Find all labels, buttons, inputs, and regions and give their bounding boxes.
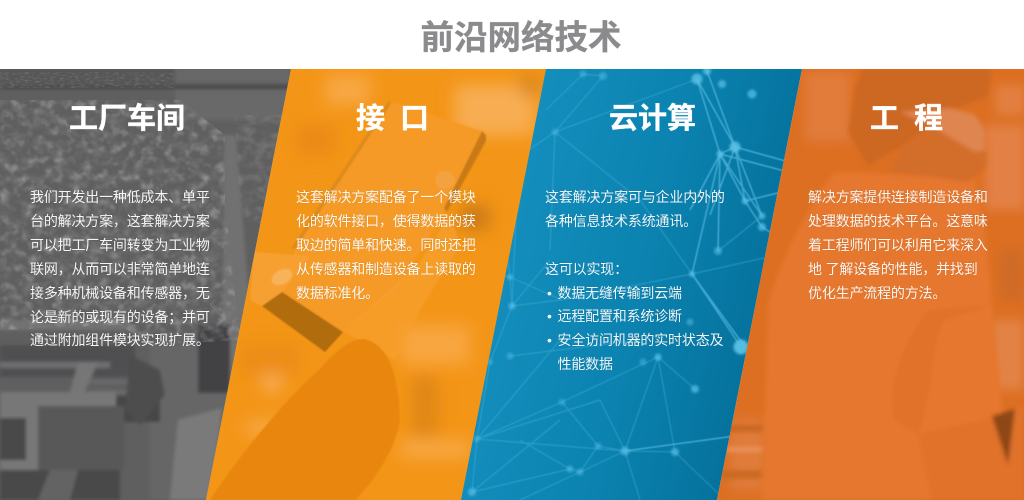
sleeve <box>210 339 400 500</box>
title: 前沿网络技术 <box>420 20 622 57</box>
bullet list: • <box>547 332 552 348</box>
network lines <box>472 74 764 500</box>
body text: 这套解决方案配备了一个模块 <box>296 189 476 205</box>
bullet list: • <box>547 308 552 324</box>
body text: 处理数据的技术平台。这意味 <box>808 213 988 229</box>
bullet text: 远程配置和系统诊断 <box>558 308 682 324</box>
body text: 我们开发出一种低成本、单平 <box>30 189 210 205</box>
body text: 数据标准化。 <box>296 285 379 301</box>
body text: 通过附加组件模块实现扩展。 <box>30 332 210 348</box>
body text: 联网，从而可以非常简单地连 <box>30 261 210 277</box>
heading: 云计算 <box>609 103 696 135</box>
shirt <box>762 172 1003 500</box>
bullet text: 数据无缝传输到云端 <box>558 284 682 300</box>
tablet photo background <box>206 69 546 500</box>
heading: 接 口 <box>356 103 429 135</box>
bullet text: 安全访问机器的实时状态及 <box>558 332 723 348</box>
panel: factory floor <box>0 69 291 500</box>
bullet text <box>558 284 723 372</box>
body text <box>296 189 476 301</box>
goggles <box>900 108 985 152</box>
bullet list <box>547 284 552 348</box>
panel: engineering <box>717 69 1024 500</box>
body text: 解决方案提供连接制造设备和 <box>808 189 988 205</box>
hair <box>848 69 992 166</box>
body text: 化的软件接口，使得数据的获 <box>296 213 476 229</box>
body text: 接多种机械设备和传感器，无 <box>30 285 210 301</box>
body text: 从传感器和制造设备上读取的 <box>296 261 476 277</box>
body text: 取边的简单和快速。同时还把 <box>296 237 476 253</box>
tablet <box>282 102 486 332</box>
engineer photo background <box>717 69 1024 500</box>
body text: 可以把工厂车间转变为工业物 <box>30 237 210 253</box>
body text: 台的解决方案，这套解决方案 <box>30 213 210 229</box>
intro text <box>545 189 725 277</box>
body below sleeve <box>921 408 1022 498</box>
factory photo background <box>0 69 291 500</box>
heading: 工 程 <box>870 103 943 135</box>
panel: interface <box>206 69 546 500</box>
bright network cluster <box>625 71 800 451</box>
body text: 着工程师们可以利用它来深入 <box>808 237 988 253</box>
network nodes <box>468 67 766 496</box>
hand <box>250 252 310 306</box>
body text <box>30 189 210 348</box>
body text: 地 了解设备的性能，并找到 <box>808 261 978 277</box>
heading: 工厂车间 <box>69 103 185 135</box>
bullet list: • <box>547 284 552 300</box>
neck and face <box>892 130 985 182</box>
body text: 论是新的或现有的设备；并可 <box>30 309 210 325</box>
intro text: 这套解决方案可与企业内外的 <box>545 189 725 205</box>
body text <box>808 189 988 301</box>
background machinery <box>728 425 763 432</box>
panel: cloud computing <box>461 69 802 500</box>
intro text: 各种信息技术系统通讯。 <box>545 213 697 229</box>
network photo background <box>461 69 802 500</box>
bullet text: 性能数据 <box>558 356 613 372</box>
body text: 优化生产流程的方法。 <box>808 285 946 301</box>
intro text: 这可以实现： <box>545 261 628 277</box>
